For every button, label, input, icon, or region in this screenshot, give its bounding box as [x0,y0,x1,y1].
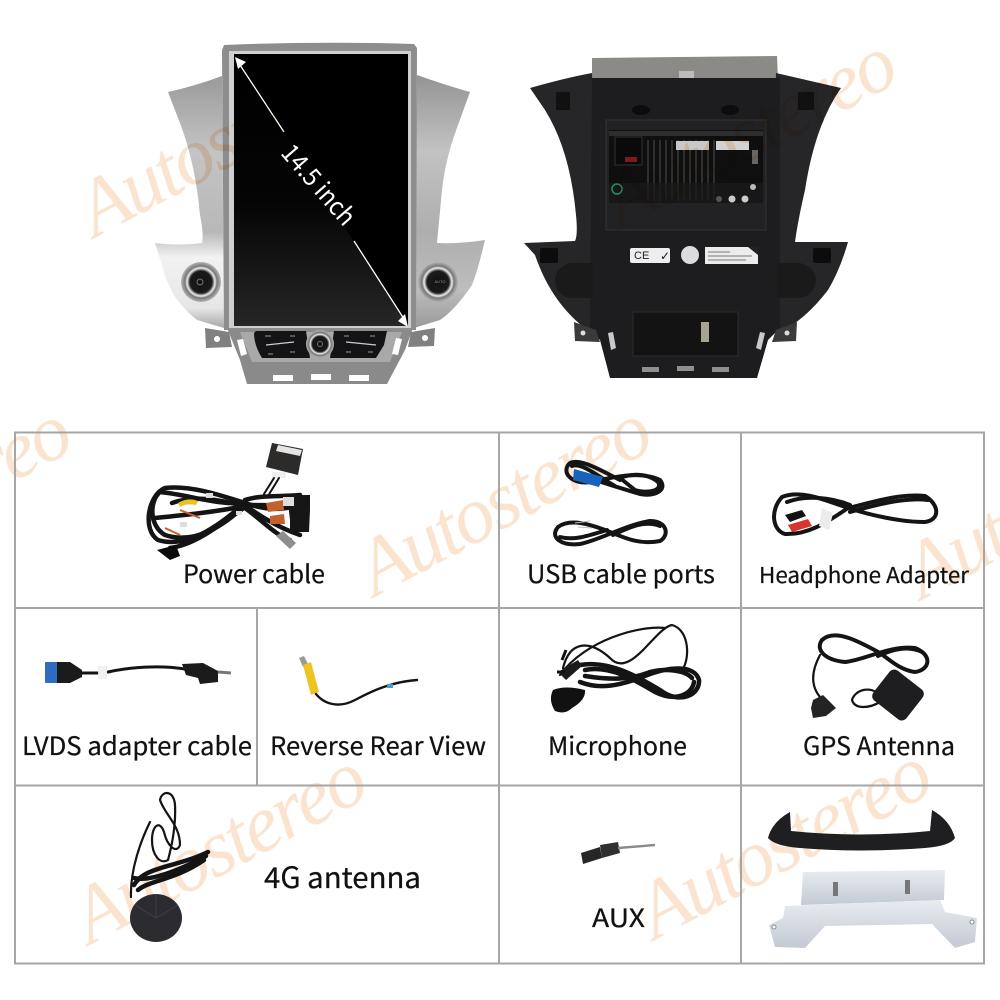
right knob [418,262,458,302]
icon: wiring harness with decoder box [149,443,310,560]
lower mounting tabs [574,322,797,342]
icon: black trim piece [768,810,955,850]
side bumps and connectors [555,263,816,298]
main rear body [590,78,780,378]
watermark text: Autostereo [338,385,666,615]
cell: power cable [149,443,325,591]
screen size label: 14.5 inch [274,135,365,233]
cell: LVDS adapter cable [22,662,252,763]
right silver wing [414,75,485,328]
icon: RCA cable with yellow plug [299,656,417,705]
round sticker [681,246,699,264]
rear module with heat sink and ports [606,120,766,230]
lower access plate with USB [633,312,738,356]
product photo: front of 14.5 inch head unit: AUTO [434,279,446,284]
lower bezel [227,328,413,384]
right black wing [770,73,848,332]
label: Headphone Adapter [759,558,969,590]
icon: 4G antenna disc and cable [130,793,208,942]
left knob [181,262,221,302]
cell: trim and mounting bracket [768,810,977,948]
watermark text: Autostereo [618,728,946,958]
icon: LVDS cable [45,662,231,684]
cell: reverse rear view [270,656,486,763]
product photo: rear of head unit [524,56,848,378]
icon: AUX jack [581,842,655,864]
label: AUX [592,899,645,935]
black screen [234,54,408,326]
certification label [630,248,670,263]
diagonal size arrow [235,57,408,327]
label: Power cable [183,555,325,591]
cell: GPS antenna [803,635,955,763]
product photo: front of 14.5 inch head unit [155,43,485,384]
top grey plate [592,56,778,80]
icon: USB cable with bare wires [555,521,666,544]
watermark text: Autostereo [583,18,911,248]
left silver wing [155,76,224,328]
center knob [306,330,334,358]
watermark text: Autostereo [53,733,381,963]
product info label [705,247,758,264]
label: Reverse Rear View [270,727,486,763]
cell: AUX [581,842,655,935]
mounting tabs [205,328,435,348]
screen frame [222,43,417,330]
cell: USB cable ports [527,462,715,591]
cell: headphone adapter [759,494,969,590]
icon: RCA cable [774,494,936,534]
product photo: rear of head unit: ✓ [660,249,670,263]
watermark text: Autostereo [58,26,386,256]
label: LVDS adapter cable [22,727,252,763]
label: GPS Antenna [803,727,955,763]
climate control panel [254,331,387,358]
icon: lapel microphone [551,625,699,712]
label: USB cable ports [527,555,715,591]
label: 4G antenna [264,855,421,897]
cell: 4G antenna [130,793,421,942]
cell: microphone [548,625,699,763]
icon: USB cable with blue connector [566,462,662,495]
product photo: rear of head unit: CE [634,250,649,262]
accessories table grid [15,432,984,964]
left black wing [524,73,600,332]
label: Microphone [548,727,687,763]
icon: metal bracket [769,870,977,948]
icon: GPS antenna puck and cable [811,635,927,723]
